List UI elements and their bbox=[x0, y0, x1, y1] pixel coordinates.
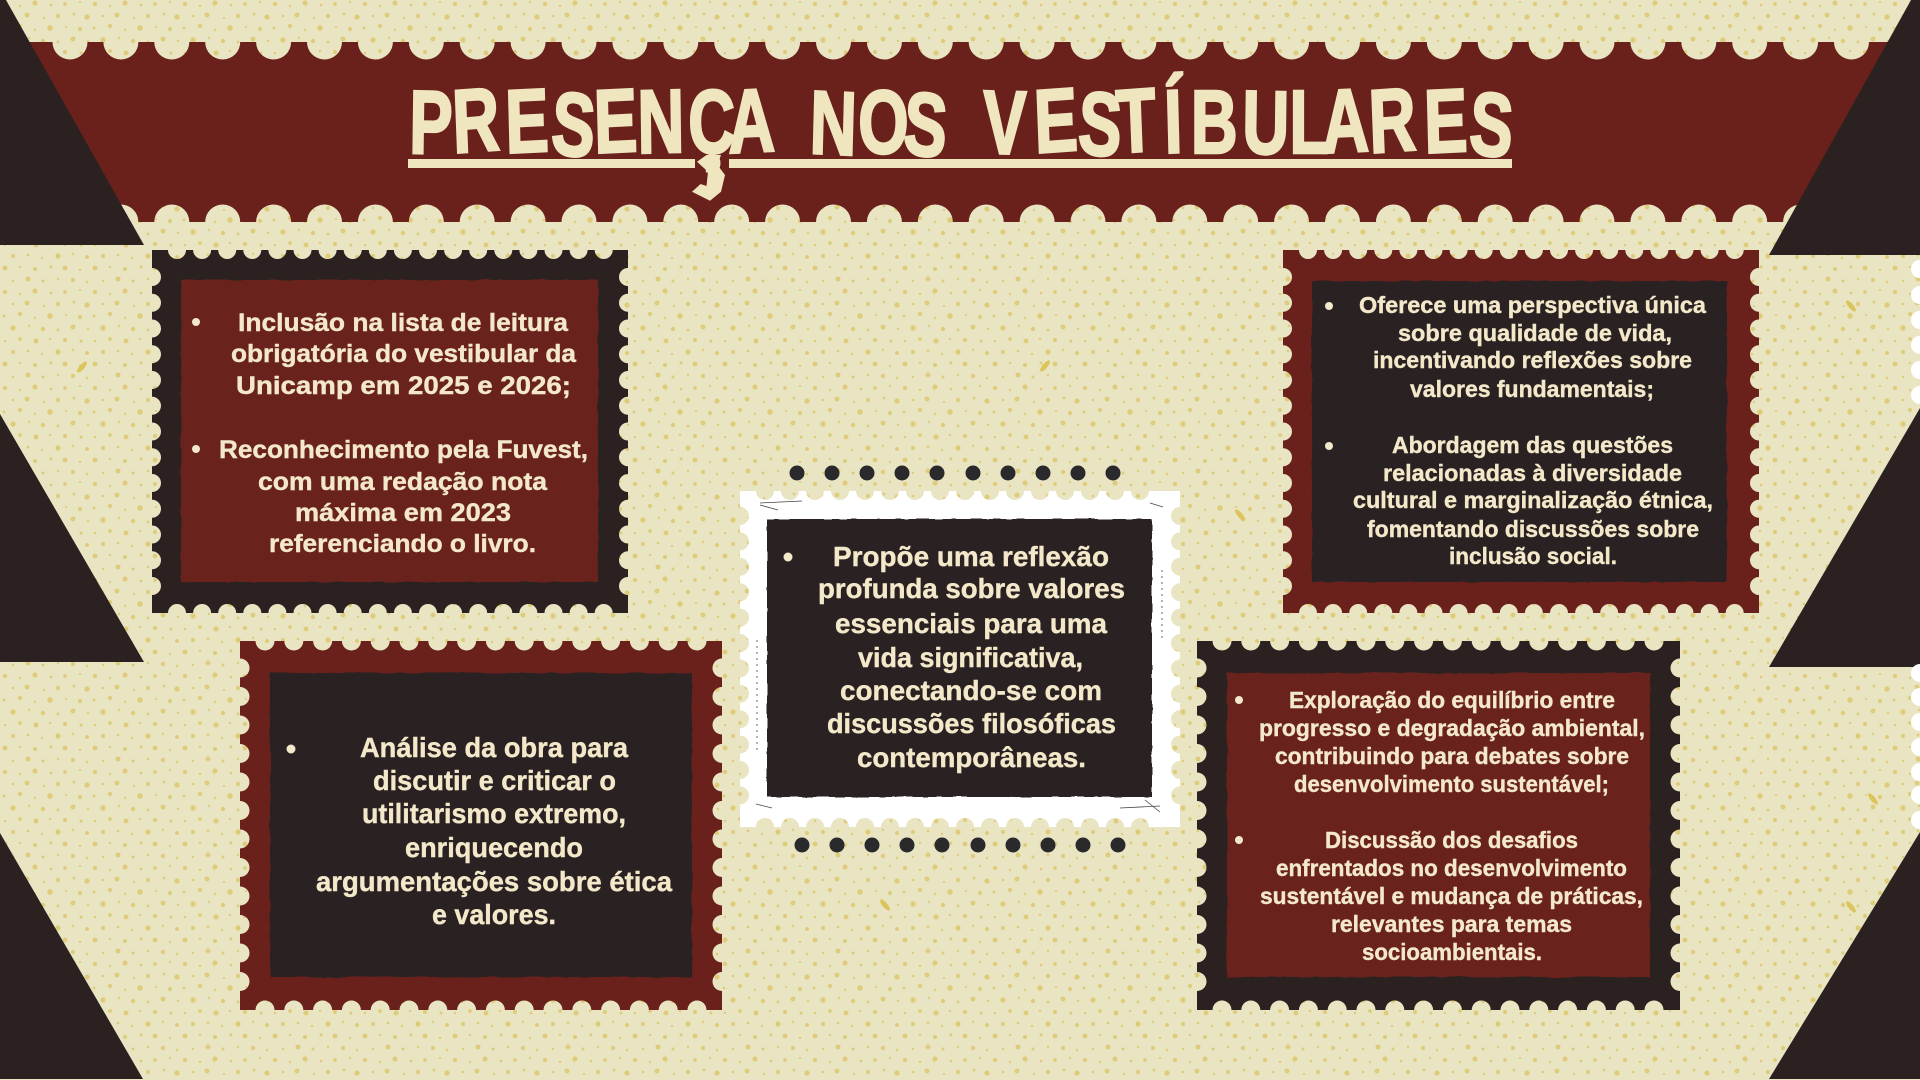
center panel: philosophical reflection: contemporâneas. bbox=[857, 742, 1086, 773]
center panel: philosophical reflection: profunda sobre valores bbox=[818, 573, 1125, 604]
panel: quality of life and diversity: fomentando discussões sobre bbox=[1367, 516, 1699, 542]
panel: reading list and Fuvest bbox=[152, 250, 628, 613]
panel: environment and sustainability: enfrentados no desenvolvimento bbox=[1276, 855, 1627, 881]
panel: utilitarianism critique: argumentações sobre ética bbox=[316, 866, 672, 897]
center panel: philosophical reflection: conectando-se com bbox=[840, 675, 1102, 706]
panel: quality of life and diversity: sobre qualidade de vida, bbox=[1398, 320, 1672, 346]
panel: quality of life and diversity: Abordagem das questões bbox=[1392, 432, 1673, 458]
dots row above center panel bbox=[790, 466, 1120, 480]
title banner bbox=[20, 42, 1900, 222]
panel: reading list and Fuvest: máxima em 2023 bbox=[295, 499, 511, 527]
panel: utilitarianism critique: utilitarismo extremo, bbox=[362, 798, 626, 829]
center panel: philosophical reflection: Propõe uma reflexão bbox=[833, 541, 1109, 572]
panel: environment and sustainability: progresso e degradação ambiental, bbox=[1259, 715, 1645, 741]
dots row below center panel bbox=[794, 838, 1126, 852]
left top triangle bbox=[0, 0, 144, 245]
center panel: philosophical reflection: vida significativa, bbox=[858, 642, 1083, 673]
right bottom triangle bbox=[1769, 832, 1920, 1079]
panel: environment and sustainability bbox=[1197, 641, 1680, 1010]
panel: utilitarianism critique bbox=[240, 641, 722, 1010]
panel: utilitarianism critique: Análise da obra para bbox=[360, 732, 628, 763]
center panel: philosophical reflection bbox=[740, 491, 1180, 827]
panel: reading list and Fuvest: Reconhecimento pela Fuvest, bbox=[219, 436, 588, 464]
panel: quality of life and diversity: valores fundamentais; bbox=[1410, 376, 1654, 402]
panel: quality of life and diversity: cultural e marginalização étnica, bbox=[1353, 487, 1713, 513]
white stamp edge on right border bbox=[1911, 260, 1920, 829]
panel: environment and sustainability: relevantes para temas bbox=[1331, 911, 1572, 937]
panel: utilitarianism critique: discutir e criticar o bbox=[373, 765, 616, 796]
panel: reading list and Fuvest: obrigatória do vestibular da bbox=[231, 340, 577, 368]
heading: Presença nos vestibulares: PRESENÇA NOS VESTÍBULARES bbox=[409, 68, 1516, 178]
right middle triangle bbox=[1769, 408, 1920, 667]
panel: quality of life and diversity bbox=[1283, 250, 1759, 613]
panel: environment and sustainability: desenvolvimento sustentável; bbox=[1294, 771, 1609, 797]
panel: reading list and Fuvest: Unicamp em 2025 e 2026; bbox=[236, 372, 571, 400]
panel: quality of life and diversity: relacionadas à diversidade bbox=[1383, 460, 1682, 486]
panel: environment and sustainability: Exploração do equilíbrio entre bbox=[1289, 687, 1615, 713]
panel: reading list and Fuvest: Inclusão na lista de leitura bbox=[238, 309, 569, 337]
panel: quality of life and diversity: incentivando reflexões sobre bbox=[1373, 347, 1692, 373]
panel: environment and sustainability: socioambientais. bbox=[1362, 939, 1542, 965]
panel: environment and sustainability: sustentável e mudança de práticas, bbox=[1260, 883, 1643, 909]
panel: quality of life and diversity: inclusão social. bbox=[1449, 543, 1617, 569]
right top triangle bbox=[1769, 0, 1920, 255]
left middle triangle bbox=[0, 414, 144, 662]
panel: reading list and Fuvest: com uma redação nota bbox=[258, 468, 548, 496]
panel: environment and sustainability: contribuindo para debates sobre bbox=[1275, 743, 1629, 769]
panel: reading list and Fuvest: referenciando o livro. bbox=[269, 530, 536, 558]
panel: utilitarianism critique: e valores. bbox=[432, 899, 556, 930]
panel: utilitarianism critique: enriquecendo bbox=[405, 832, 583, 863]
center panel: philosophical reflection: essenciais para uma bbox=[835, 608, 1107, 639]
panel: environment and sustainability: Discussão dos desafios bbox=[1325, 827, 1578, 853]
center panel: philosophical reflection: discussões filosóficas bbox=[827, 708, 1116, 739]
left bottom triangle bbox=[0, 833, 143, 1079]
panel: quality of life and diversity: Oferece uma perspectiva única bbox=[1359, 292, 1706, 318]
accent specks on background bbox=[76, 299, 1879, 914]
